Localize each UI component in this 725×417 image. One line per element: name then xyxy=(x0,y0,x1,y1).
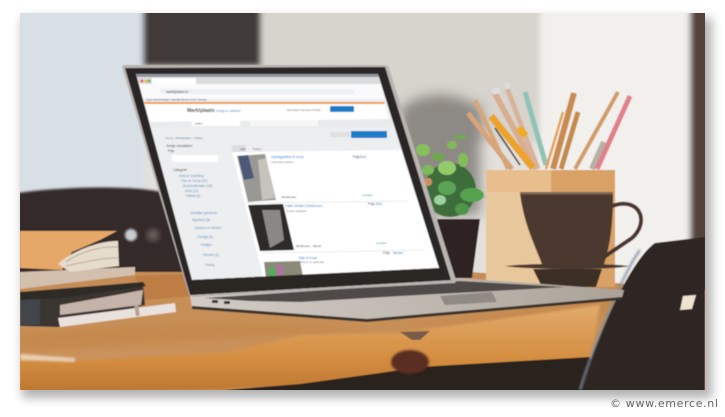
listing text: Eindhoven · Nieuw xyxy=(296,244,322,248)
browser tab bar xyxy=(137,77,381,84)
sidebar: Hout (12) xyxy=(185,189,198,193)
sidebar: Kantoor en Winkel xyxy=(195,226,221,230)
dark chair behind laptop xyxy=(20,186,183,273)
blue action button xyxy=(351,131,387,138)
desk shadow underside xyxy=(219,356,592,390)
watermark: © www.emerce.nl xyxy=(610,397,718,410)
sidebar xyxy=(166,144,221,267)
sidebar: Huis en Inrichting xyxy=(179,174,204,178)
mac menu bar xyxy=(136,74,379,77)
plant pot xyxy=(437,219,480,278)
sidebar: Prijs xyxy=(168,149,175,153)
sidebar: Bouwmaterialen (26) xyxy=(183,184,212,188)
listing text: Bod xyxy=(360,155,366,159)
sidebar: Partijen xyxy=(201,243,212,247)
listing image 3 xyxy=(264,261,303,278)
listing text: Prijs: xyxy=(353,155,361,159)
browser address bar xyxy=(139,84,385,99)
laptop lid frame xyxy=(122,65,456,297)
listing text: Pallet afhalen Eindhoven xyxy=(285,204,323,208)
plant leaves xyxy=(416,134,486,218)
pencils xyxy=(468,85,630,169)
listing text: Nieuw en gebruikt xyxy=(300,260,324,264)
search row xyxy=(186,119,390,122)
usb ports xyxy=(212,300,218,303)
laptop screen: marktplaats.nl xyxy=(166,90,188,94)
listing text: Opslagpallets te koop xyxy=(271,155,304,159)
background wall xyxy=(20,13,705,290)
listing cards xyxy=(232,150,439,277)
listing text xyxy=(271,155,404,264)
listing text: Bieden xyxy=(393,251,404,255)
laptop screen: Berichten Favoriet Profiel xyxy=(287,108,321,112)
coffee cup xyxy=(505,192,641,287)
white pen xyxy=(58,303,176,327)
bookmarks: Apps Aanbiedingen Zakelijk Wonen Auto Overige xyxy=(146,98,207,102)
listing image 2 xyxy=(248,204,294,251)
notebooks stack xyxy=(20,231,146,327)
sidebar: Agrarisch (8) xyxy=(192,218,210,222)
laptop base xyxy=(190,278,624,320)
sidebar: Tuin en Terras (57) xyxy=(181,179,208,183)
laptop xyxy=(122,65,624,322)
listing text: Prijs: xyxy=(383,251,391,255)
sidebar: Categorie xyxy=(173,168,187,172)
breadcrumb: Home › Marktplaats › Pallets xyxy=(165,136,203,140)
orange header line xyxy=(144,102,385,104)
listing image 1 xyxy=(237,154,276,202)
listing text: Prijs: xyxy=(368,202,376,206)
sidebar: Zakelijke goederen xyxy=(190,211,217,215)
marketplace logo: Marktplaats xyxy=(187,108,215,114)
listing text: Bod xyxy=(376,202,382,206)
sidebar: Pallets (5) xyxy=(186,194,200,198)
listing filter tabs xyxy=(232,145,246,152)
blue header button xyxy=(330,106,354,112)
site header xyxy=(145,104,390,122)
desk front edge xyxy=(20,305,600,392)
listing text: Bak te koop xyxy=(299,256,317,260)
laptop screen: Foto's xyxy=(253,147,262,151)
laptop screen xyxy=(136,74,439,280)
sidebar: Toetje resultaten xyxy=(166,144,192,148)
tablet in foreground xyxy=(580,237,705,392)
laptop screen: pallet xyxy=(195,122,202,126)
listing text: Contact xyxy=(362,193,373,197)
laptop screen: Lijst xyxy=(240,147,246,151)
listing text: Goede kwaliteit xyxy=(286,209,307,213)
laptop screen: Vraag en aanbod xyxy=(216,109,241,113)
listing text: Gebruikte pallets xyxy=(271,160,294,164)
listing text: Eindhoven xyxy=(282,195,297,199)
sidebar: Overige (6) xyxy=(197,235,213,239)
sidebar: Vervoer (3) xyxy=(203,253,219,257)
pencil holder xyxy=(486,170,615,287)
sidebar: Overig xyxy=(205,263,215,267)
desk top xyxy=(10,272,710,400)
screen bezel bottom xyxy=(190,268,451,295)
listing text: Contact xyxy=(376,241,387,245)
